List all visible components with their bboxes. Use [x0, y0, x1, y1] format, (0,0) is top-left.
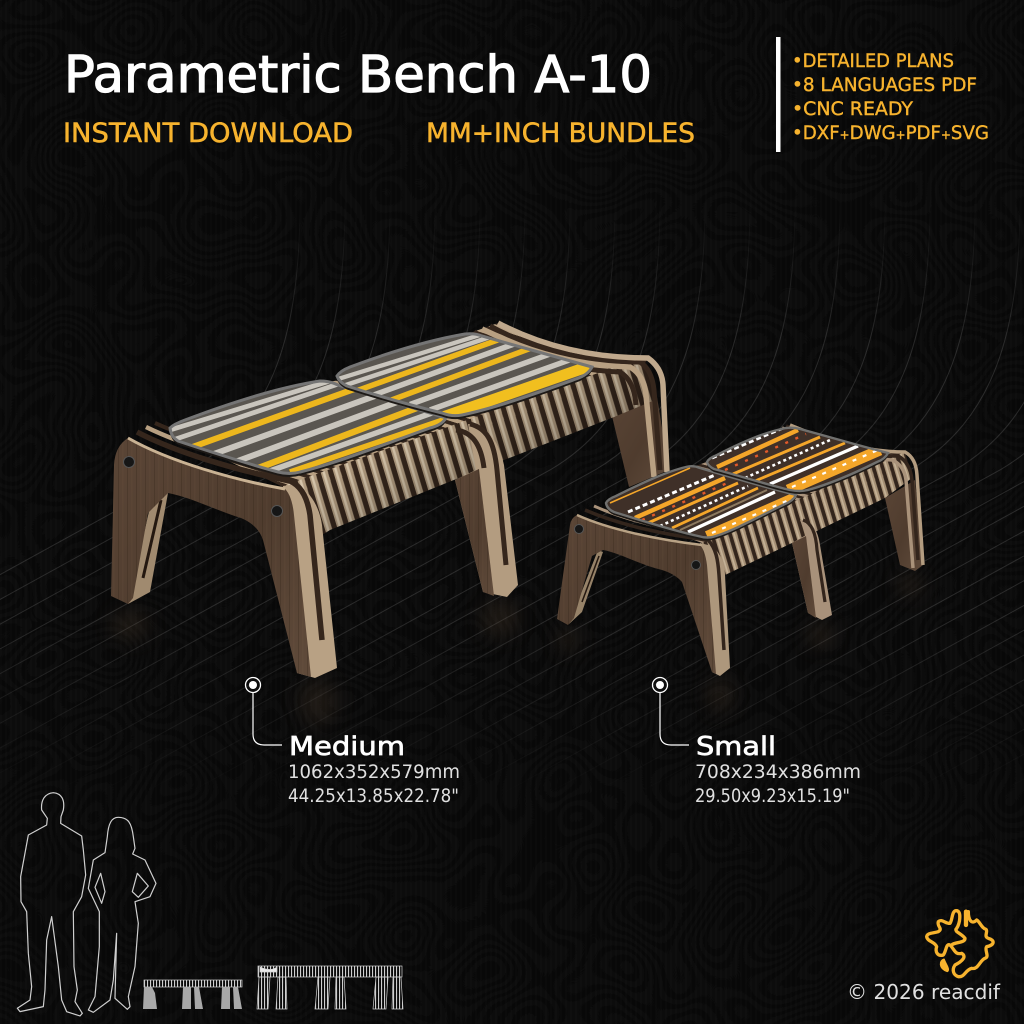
seat top surface [172, 323, 648, 492]
scale drawing: medium bench [257, 966, 403, 1009]
subtitle: instant download: INSTANT DOWNLOAD [63, 118, 353, 149]
woman outline [88, 817, 156, 1012]
scale drawing: small bench [143, 980, 242, 1009]
small size in mm: 708x234x386mm [695, 761, 861, 783]
vertical divider bar [776, 37, 780, 152]
marker and leader line [652, 678, 689, 745]
cushion, front [168, 380, 448, 477]
front end panel [557, 506, 730, 676]
floor contour lines [0, 234, 1024, 748]
small size in inches: 29.50x9.23x15.19" [695, 785, 850, 807]
feature list [792, 51, 989, 144]
scale figures: people [17, 793, 156, 1016]
feature: file formats: •DXF+DWG+PDF+SVG [792, 123, 989, 144]
bolts [574, 524, 700, 570]
side ribs [702, 452, 912, 575]
cushion, back [335, 332, 594, 420]
feature: detailed plans: •DETAILED PLANS [792, 51, 954, 72]
cushion, back [706, 426, 890, 494]
seat top surface [608, 425, 905, 548]
floor reflections [110, 573, 924, 726]
back leg [885, 480, 923, 571]
back end strips [474, 323, 667, 477]
logo [927, 911, 993, 977]
cushion, front [604, 465, 798, 540]
callout: small [652, 678, 861, 807]
feature: languages: •8 LANGUAGES PDF [792, 75, 977, 96]
small bench [557, 420, 923, 676]
man outline [17, 793, 86, 1016]
medium bench [111, 323, 669, 678]
side ribs [283, 358, 655, 535]
bolts [124, 456, 282, 516]
marker and leader line [246, 678, 282, 745]
small heading: Small [696, 732, 776, 762]
medium size in inches: 44.25x13.85x22.78" [288, 785, 459, 807]
title: Parametric Bench A-10 [64, 46, 652, 105]
subtitle: bundles: MM+INCH BUNDLES [426, 118, 695, 149]
back end strips [782, 425, 923, 568]
medium size in mm: 1062x352x579mm [288, 761, 460, 783]
middle leg [792, 520, 832, 620]
copyright: © 2026 reacdif [847, 980, 1001, 1004]
callout: medium [246, 678, 460, 807]
back leg [612, 385, 669, 487]
front end panel [111, 423, 337, 678]
feature: cnc ready: •CNC READY [792, 99, 914, 120]
medium heading: Medium [289, 732, 405, 762]
middle leg [455, 424, 518, 597]
